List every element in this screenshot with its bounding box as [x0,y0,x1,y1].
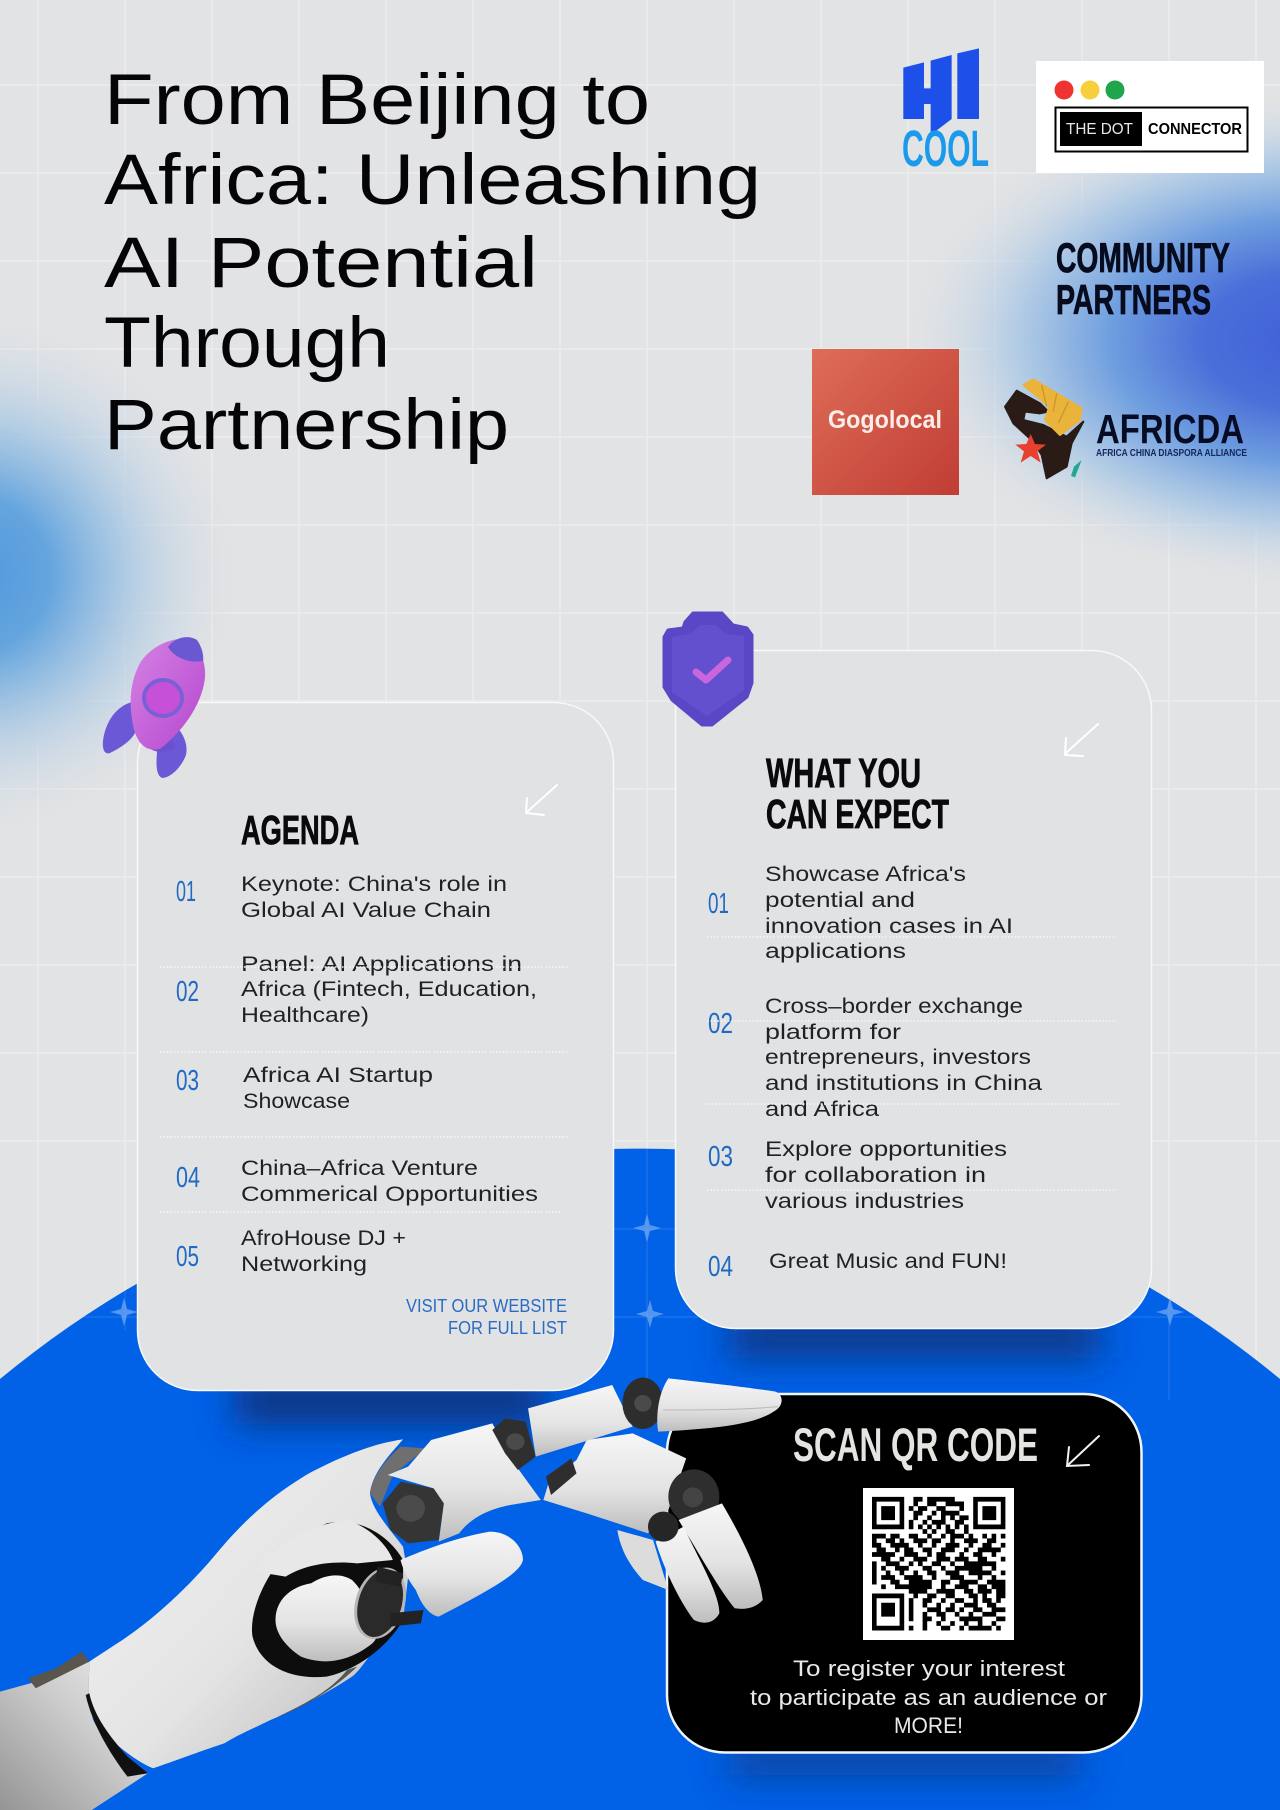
item 03 [708,1138,1007,1213]
blue circle backdrop [0,1140,1280,1810]
item 01 [708,863,1013,963]
item 01: applications [765,940,906,963]
item 04: Great Music and FUN! [769,1250,1007,1273]
palm streak [278,1667,357,1717]
item 03: various industries [765,1190,964,1213]
heading: scan qr code: SCAN QR CODE [793,1418,1038,1471]
logo: The Dot Connector: CONNECTOR [1148,121,1242,138]
item 01: 01 [176,876,196,908]
thumb tip [401,1532,523,1617]
register text: MORE! [894,1713,963,1738]
item 02: and institutions in China [765,1072,1042,1095]
item 02: entrepreneurs, investors [765,1046,1031,1069]
icon: rocket [103,637,205,778]
joint two [622,1378,663,1429]
item 02: platform for [765,1021,901,1044]
dark gap [370,1447,426,1507]
item 01 [176,873,507,922]
panel: scan qr code [667,1394,1142,1752]
item 04 [176,1157,538,1206]
item 01: innovation cases in AI [765,915,1013,938]
item 02: Cross–border exchange [765,995,1023,1018]
item 03: for collaboration in [765,1164,986,1187]
logo: Africda: AFRICA CHINA DIASPORA ALLIANCE [1096,447,1247,459]
item 01: potential and [765,889,915,912]
link: visit website: VISIT OUR WEBSITE [406,1296,567,1316]
item 03: Africa AI Startup [243,1064,433,1087]
panel: agenda [138,702,614,1390]
item 03: Explore opportunities [765,1138,1007,1161]
item 04: 04 [708,1251,733,1283]
joint four [648,1512,679,1542]
palm [89,1439,408,1768]
title: Through [104,304,390,383]
item 02: Healthcare) [241,1004,369,1027]
heading: agenda: AGENDA [241,807,359,853]
title: Africa: Unleashing [104,141,761,220]
logo: Gogolocal: Gogolocal [828,406,942,434]
fingertip [657,1378,782,1432]
title [104,61,761,465]
item 05 [176,1227,406,1276]
item 04: Commerical Opportunities [241,1183,538,1206]
link: visit website: FOR FULL LIST [448,1318,567,1338]
logo: The Dot Connector [1036,61,1264,173]
icon: arrow [1067,1436,1099,1466]
item 03: 03 [176,1065,199,1097]
register text: to participate as an audience or [750,1685,1107,1710]
item 01: Keynote: China's role in [241,873,507,896]
item 03 [176,1064,433,1113]
thumb base [276,1575,377,1661]
qr code [863,1488,1014,1640]
item 04: China–Africa Venture [241,1157,478,1180]
item 04: 04 [176,1162,200,1194]
item 01: Global AI Value Chain [241,899,491,922]
dark mechanism [546,1458,577,1495]
joint three [668,1469,719,1524]
item 03: Showcase [243,1090,350,1113]
knuckle joint [383,1482,444,1543]
item 01: 01 [708,888,729,920]
logo: Africda: AFRICDA [1096,406,1244,452]
middle finger segment [543,1433,686,1533]
joint one [492,1418,536,1470]
wrist seam [86,1693,148,1777]
forearm [0,1662,148,1810]
logo: Hi Cool [902,48,989,177]
heading: what you can expect: CAN EXPECT [766,791,949,837]
item 03: 03 [708,1141,733,1173]
icon: shield [664,613,752,725]
item 02 [708,995,1042,1121]
card shadows [235,1316,1100,1777]
icon: arrow [1065,724,1098,756]
heading: what you can expect [766,750,949,837]
finger one [679,1503,763,1609]
item 02: 02 [708,1008,733,1040]
item 05: AfroHouse DJ + [241,1227,406,1250]
item 01: Showcase Africa's [765,863,966,886]
logo: The Dot Connector: THE DOT [1066,121,1133,138]
title: From Beijing to [104,61,650,140]
heading: community partners [1056,234,1230,323]
link: visit website [406,1296,567,1338]
finger two [656,1527,719,1623]
heading: what you can expect: WHAT YOU [766,750,921,796]
upper palm panel [258,1520,393,1577]
robot hand [0,1378,782,1810]
item 05: Networking [241,1253,367,1276]
icon: arrow [526,785,557,815]
item 05: 05 [176,1241,199,1273]
title: AI Potential [104,224,538,303]
item 02: Africa (Fintech, Education, [241,978,537,1001]
title: Partnership [104,386,509,465]
panel: what you can expect [676,650,1152,1328]
item 04 [708,1250,1007,1283]
register text [750,1656,1107,1738]
logo: Gogolocal [812,349,959,495]
thumb ring [349,1567,411,1640]
thumb actuators [375,1567,423,1627]
first phalanx [388,1423,541,1542]
register text: To register your interest [793,1656,1065,1681]
item 02: 02 [176,976,199,1008]
item 02 [176,953,537,1027]
logo: Africda [1005,379,1247,478]
wrist bump [28,1652,89,1688]
heading: community partners: PARTNERS [1056,276,1211,323]
palm cavity [252,1522,403,1677]
logo: Hi Cool: COOL [902,120,989,177]
back finger [617,1530,668,1590]
item 02: Panel: AI Applications in [241,953,522,976]
second phalanx [528,1385,633,1457]
item 02: and Africa [765,1098,879,1121]
